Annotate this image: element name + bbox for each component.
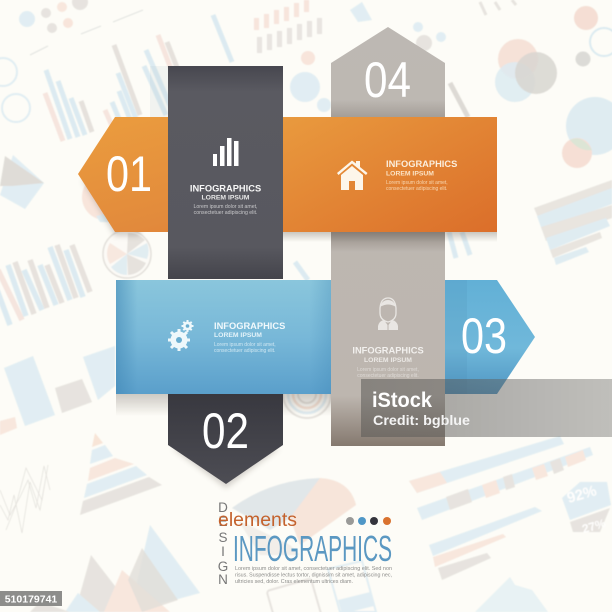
pie chart <box>103 230 151 278</box>
vertical word DESIGN: I <box>221 544 225 559</box>
bar chart 3 <box>0 245 90 325</box>
grey panel text: LOREM IPSUM <box>364 357 412 364</box>
dark panel text: Lorem ipsum dolor sit amet, <box>193 204 258 210</box>
number 04: 04 <box>364 52 411 108</box>
shadow under orange ribbon <box>283 232 497 242</box>
vertical word DESIGN: G <box>218 559 228 574</box>
04 grey arrow <box>331 27 445 446</box>
mountains <box>30 525 200 612</box>
grey panel text: consectetuer adipiscing elit. <box>357 373 419 379</box>
line chart <box>0 465 50 533</box>
diagonal ribbons <box>409 436 593 580</box>
center 3d pie <box>232 478 356 555</box>
shadow under blue ribbon <box>116 394 331 416</box>
hexagon percent badge: 92% <box>565 482 599 507</box>
panel 01 orange arrow <box>78 117 497 232</box>
left gauges <box>0 58 30 122</box>
number 02: 02 <box>202 403 249 459</box>
grey panel text: INFOGRAPHICS <box>352 346 424 356</box>
soft shadows behind arrows <box>82 180 280 488</box>
orange panel text: INFOGRAPHICS <box>386 159 457 169</box>
title elements: elements <box>218 509 297 531</box>
watermark: Credit: bgblue <box>373 413 471 428</box>
panel 01 dark ribbon <box>150 66 283 279</box>
orange panel text: LOREM IPSUM <box>386 170 434 178</box>
watermark: iStock <box>372 389 432 412</box>
blue panel text: LOREM IPSUM <box>214 332 262 339</box>
small charts by arrows <box>295 83 508 320</box>
body text: Lorem ipsum dolor sit amet, consectetuer adipiscing elit. Sed non <box>235 566 392 572</box>
panel 04 grey lower content <box>331 280 445 446</box>
bar chart 2 <box>105 15 232 128</box>
radar shape <box>0 155 44 209</box>
panel 03 blue arrow <box>445 280 535 394</box>
blue panel text: Lorem ipsum dolor sit amet, <box>214 342 276 348</box>
heading block <box>218 500 392 587</box>
vertical word DESIGN: N <box>218 572 228 587</box>
vertical word DESIGN <box>218 500 228 587</box>
image id tag: 510179741 <box>5 594 57 606</box>
top people <box>254 0 322 53</box>
colour dots <box>346 517 391 525</box>
right bubbles <box>562 6 612 168</box>
grey panel text: Lorem ipsum dolor sit amet, <box>357 367 419 373</box>
number 03: 03 <box>461 308 507 364</box>
vertical word DESIGN: E <box>218 514 228 529</box>
panel 02 dark arrow <box>168 394 283 484</box>
circle behind orange arrow <box>82 174 128 222</box>
dark panel text: consectetuer adipiscing elit. <box>194 210 257 216</box>
body text <box>235 566 392 585</box>
hexagon percent badge <box>562 482 611 536</box>
vertical word DESIGN: D <box>218 500 228 515</box>
right horizontal bars <box>534 180 612 265</box>
blue panel text: consectetuer adipiscing elit. <box>214 348 275 354</box>
device shapes <box>267 561 376 612</box>
top left bubbles <box>19 0 143 55</box>
dark panel text: LOREM IPSUM <box>202 194 250 202</box>
bottom blue spikes <box>475 577 548 612</box>
number 01: 01 <box>106 146 152 202</box>
image id tag <box>0 591 62 606</box>
watermark <box>361 379 612 437</box>
orange panel text <box>386 159 457 192</box>
orange panel text: Lorem ipsum dolor sit amet, <box>386 180 448 186</box>
right top bars <box>480 0 516 15</box>
body text: risus. Suspendisse lectus tortor, dignissim sit amet, adipiscing nec, <box>235 572 392 578</box>
icon: person <box>378 298 398 330</box>
icon: house <box>337 160 368 190</box>
dark panel text <box>190 184 261 216</box>
blue panel text <box>214 321 285 354</box>
venn diagram <box>495 39 557 102</box>
bar chart 1 <box>45 70 92 141</box>
body text: ultricies sed, dolor. Cras elementum ultrices diam. <box>235 579 353 585</box>
grey panel text <box>352 346 424 379</box>
orange panel text: consectetuer adipiscing elit. <box>386 186 447 192</box>
panel 02 blue ribbon <box>116 280 331 394</box>
title INFOGRAPHICS: INFOGRAPHICS <box>233 528 392 569</box>
hexagon percent badge: 27% <box>580 516 608 536</box>
dark panel text: INFOGRAPHICS <box>190 184 261 194</box>
vertical word DESIGN: S <box>218 530 228 545</box>
blue panel text: INFOGRAPHICS <box>214 321 285 331</box>
icon: gears <box>168 320 194 351</box>
top bubbles mid <box>290 2 446 112</box>
icon: bar chart <box>213 138 238 166</box>
concentric rings <box>283 370 331 418</box>
pyramid <box>80 433 162 515</box>
tall blocks <box>0 346 115 435</box>
